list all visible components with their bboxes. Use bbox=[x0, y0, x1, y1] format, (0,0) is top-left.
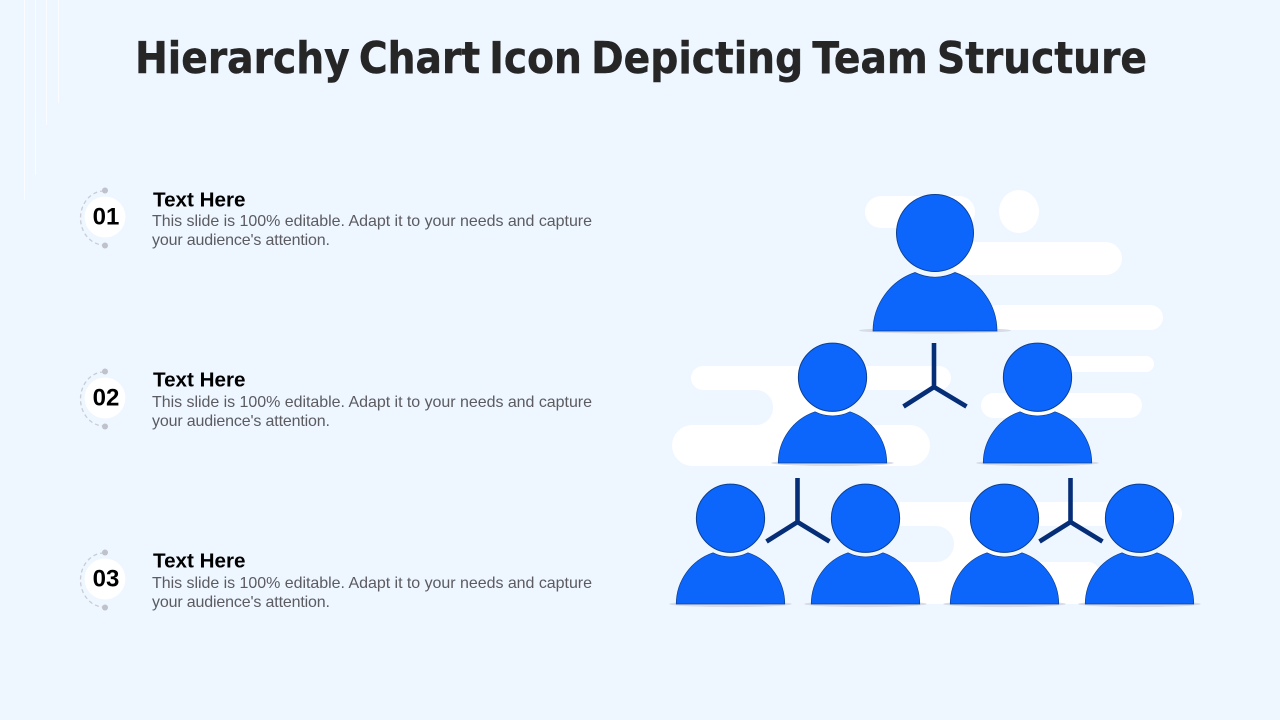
person: second row left bbox=[771, 343, 894, 466]
body text 02: This slide is 100% editable. Adapt it to your needs and capture bbox=[152, 394, 592, 411]
person: third row 2 bbox=[804, 484, 927, 607]
badge 01 bbox=[81, 188, 126, 248]
badge 03 bbox=[80, 550, 126, 610]
body text 03: This slide is 100% editable. Adapt it to your needs and capture bbox=[152, 575, 592, 592]
heading 02: Text Here bbox=[153, 370, 246, 392]
body text 03: your audience's attention. bbox=[152, 594, 330, 611]
title: Hierarchy Chart Icon Depicting Team Structure bbox=[135, 33, 1147, 84]
list item 02 bbox=[80, 368, 592, 430]
body text 01: This slide is 100% editable. Adapt it to your needs and capture bbox=[152, 213, 592, 230]
badge 01: 01 bbox=[93, 204, 119, 230]
top person bbox=[859, 194, 1011, 334]
badge 02 bbox=[80, 368, 126, 430]
person: third row 3 bbox=[943, 484, 1066, 607]
connector: top to second row bbox=[904, 343, 966, 406]
connector: third row left pair bbox=[766, 478, 830, 542]
hierarchy illustration bbox=[640, 190, 1201, 607]
body text 01: your audience's attention. bbox=[152, 232, 330, 249]
background cloud shapes bbox=[640, 190, 1182, 604]
list item 03 bbox=[80, 550, 592, 611]
badge 03: 03 bbox=[93, 566, 119, 592]
body text 02: your audience's attention. bbox=[152, 413, 330, 430]
list item 01 bbox=[81, 188, 592, 249]
badge 02: 02 bbox=[93, 384, 119, 412]
heading 01: Text Here bbox=[153, 190, 246, 212]
person: second row right bbox=[976, 343, 1099, 466]
heading 03: Text Here bbox=[153, 550, 246, 572]
connector: third row right pair bbox=[1040, 478, 1102, 542]
person: third row 1 bbox=[669, 484, 792, 607]
person: third row 4 bbox=[1078, 484, 1201, 607]
